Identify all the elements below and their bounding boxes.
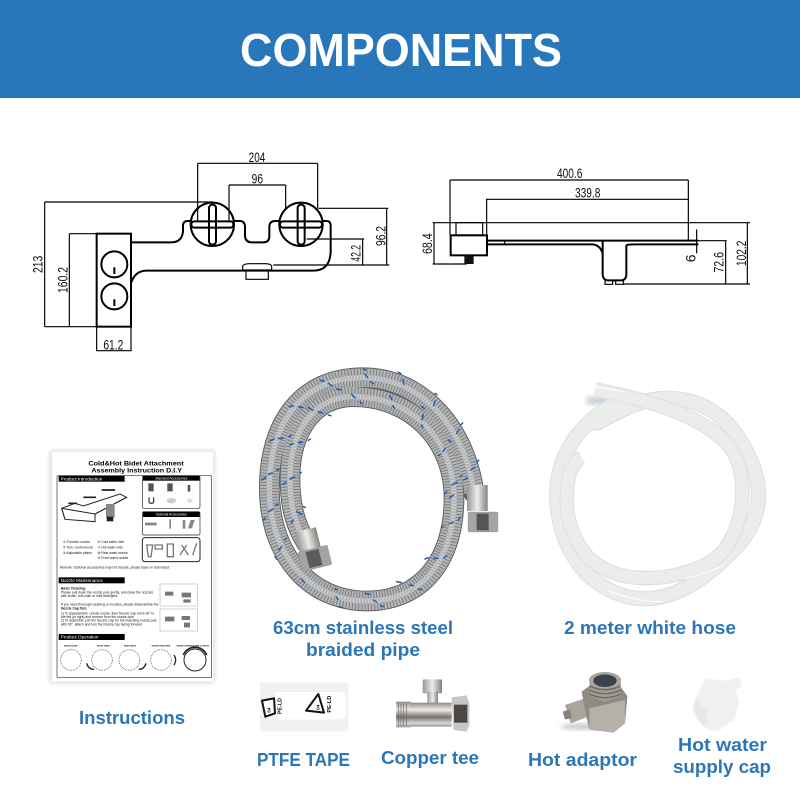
instruction sheet: Assembly Instruction D.I.Y: [91, 468, 182, 474]
instruction sheet: ① Function nozzle: [63, 540, 90, 544]
instruction sheet: Cold&Hot Bidet Attachment: [88, 462, 184, 468]
white hose: [557, 387, 759, 602]
dimension lines: 96.2: [372, 226, 388, 246]
instruction sheet: MODE/CLEAN: [64, 645, 78, 648]
instruction sheet: Please pull down the nozzle pole gently, and clean the nozzles: [61, 590, 153, 594]
dimension lines: 61.2: [103, 336, 123, 352]
copper tee: [396, 679, 469, 732]
hot water supply cap: [693, 678, 742, 731]
left fitting: [293, 526, 332, 572]
dimension lines: 6: [682, 254, 698, 262]
side view dimension drawing: [419, 165, 750, 284]
braided pipe label: 63cm stainless steel: [273, 618, 453, 638]
instruction sheet: Nozzle Cap first.: [61, 606, 87, 610]
dimension lines: 102.2: [733, 241, 749, 266]
instruction sheet: WATER TEMPERATURE CONTROL: [177, 645, 210, 648]
cap label: [673, 735, 771, 777]
instruction sheet: ③ Adjustable plates: [63, 551, 92, 555]
braided pipe label: braided pipe: [306, 640, 420, 660]
dimension lines: 72.6: [710, 252, 726, 273]
PTFE tape: 04: [267, 707, 272, 713]
dimension lines: 42.2: [348, 245, 364, 262]
instruction sheet: ⑥ Cold water inlet: [97, 540, 124, 544]
instruction sheet: with 90°, attach and turn the Nozzle cap facing forward.: [61, 622, 143, 626]
dimension lines: 339.8: [575, 184, 600, 200]
dimension lines: 213: [30, 256, 46, 273]
dimension lines: 204: [249, 149, 265, 165]
white hose label: 2 meter white hose: [564, 618, 736, 638]
title: COMPONENTS: [240, 24, 562, 76]
instruction sheet: Optional Accessories: [156, 513, 187, 517]
PTFE tape: PE-LD: [277, 698, 283, 714]
bidet side outline: [451, 223, 698, 284]
instruction sheet: ⑦ Hot water inlet: [97, 546, 123, 550]
instruction sheet: 1) To disassemble: unlock nozzle, then Nozzle Cap turns 90° to: [61, 612, 154, 616]
instruction sheet: with brush, soft cloth or mild detergent.: [61, 594, 118, 598]
instruction sheet: REAR WASH: [124, 645, 137, 648]
header banner: [0, 0, 800, 98]
PTFE tape label: PTFE TAPE: [257, 750, 350, 770]
instruction sheet: Product Introduction: [61, 476, 103, 481]
cap label: Hot water: [678, 735, 767, 755]
instruction sheet: 2) To assemble: join the Nozzle Cap for the matching nozzle pole: [61, 619, 157, 623]
instruction sheet: Standard Accessories: [155, 477, 188, 481]
dimension lines: 160.2: [55, 267, 71, 293]
dimension lines: 96: [252, 171, 263, 187]
dimension lines: [30, 149, 389, 352]
instruction sheet: ⑨ Front wash nozzle: [97, 556, 128, 560]
instructions label: Instructions: [79, 708, 185, 728]
hot adaptor: [560, 672, 627, 733]
top view dimension drawing: [30, 149, 389, 352]
instruction sheet: Nozzle Maintenance: [61, 578, 103, 583]
dimension lines: 68.4: [419, 233, 435, 254]
blue tracer marks: [262, 369, 479, 608]
bidet body outline: [97, 203, 331, 327]
instruction sheet: WATER PRESSURE: [152, 645, 171, 648]
instruction sheet: [50, 451, 214, 683]
cap label: supply cap: [673, 757, 771, 777]
braided pipe label: [273, 618, 453, 660]
instruction sheet: If you need thorough cleaning on nozzles, please disassemble the: [61, 603, 158, 607]
braided steel pipe: [262, 369, 498, 608]
instruction sheet: Product Operation: [61, 635, 99, 640]
PTFE tape: [260, 683, 348, 731]
instruction sheet: Basic Cleaning:: [61, 587, 86, 591]
right fitting: [467, 485, 498, 532]
braided coil: [262, 369, 479, 608]
instruction sheet: FRONT WASH: [97, 645, 111, 648]
hot adaptor label: Hot adaptor: [528, 750, 637, 770]
instruction sheet: ⑧ Rear wash nozzle: [97, 551, 128, 555]
copper tee label: Copper tee: [381, 748, 479, 768]
instruction sheet: the left (or right) and remove from the nozzle pole.: [61, 615, 135, 619]
PTFE tape: 04: [315, 704, 321, 710]
instruction sheet: ② Tem. control knob: [63, 546, 93, 550]
instruction sheet: Remark: Optional accessories may not include, please base on real object: [60, 565, 169, 569]
dimension lines: 400.6: [557, 165, 582, 181]
dimension lines: [419, 165, 750, 284]
PTFE tape: PE-LD: [327, 696, 333, 713]
